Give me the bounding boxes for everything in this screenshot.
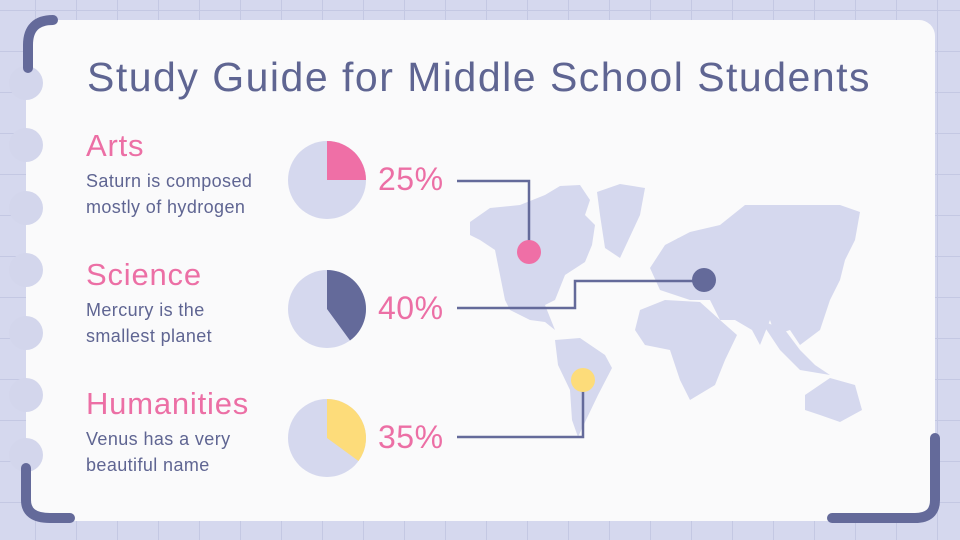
title: Study Guide for Middle School Students: [87, 54, 871, 100]
text: science: [86, 300, 212, 346]
marker: pink: [517, 240, 541, 264]
text: humanities: beautiful name: [86, 455, 210, 475]
marker: yellow: [571, 368, 595, 392]
section: arts: [86, 128, 252, 217]
text: science: smallest planet: [86, 326, 212, 346]
section: humanities: [86, 386, 249, 475]
percent: 40: 40%: [378, 290, 444, 326]
text: arts: Saturn is composed: [86, 171, 252, 191]
heading: arts: Arts: [86, 128, 144, 163]
pie: 25%: [288, 141, 366, 219]
text: arts: mostly of hydrogen: [86, 197, 245, 217]
heading: science: Science: [86, 257, 202, 292]
pie: 40%: [288, 270, 366, 348]
text: humanities: Venus has a very: [86, 429, 230, 449]
text: humanities: [86, 429, 230, 475]
heading: humanities: Humanities: [86, 386, 249, 421]
section: science: [86, 257, 212, 346]
percent: 25: 25%: [378, 161, 444, 197]
marker: navy: [692, 268, 716, 292]
text: arts: [86, 171, 252, 217]
text: science: Mercury is the: [86, 300, 205, 320]
pie: 35%: [288, 399, 366, 477]
percent: 35: 35%: [378, 419, 444, 455]
